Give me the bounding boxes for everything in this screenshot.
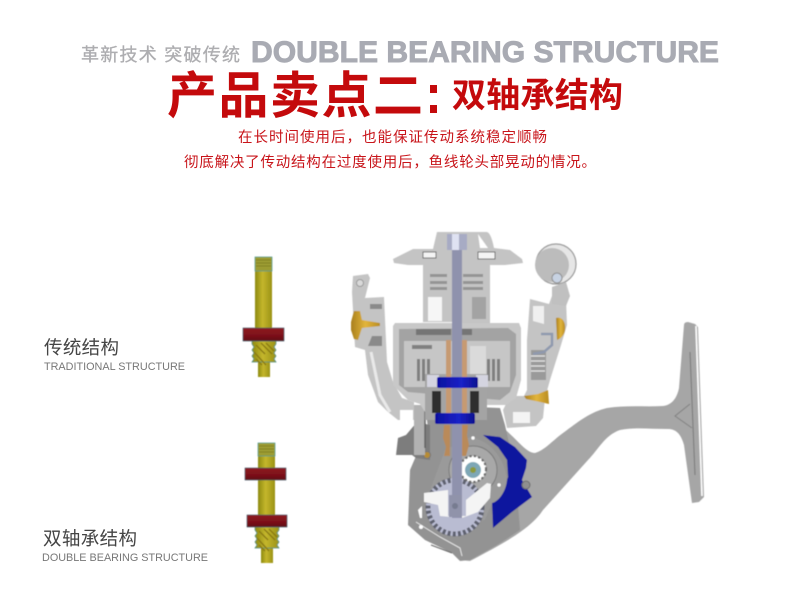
description text: 在长时间使用后，也能保证传动系统稳定顺畅 xyxy=(238,129,547,146)
label: traditional structure: TRADITIONAL STRUCTURE xyxy=(44,361,185,373)
label: double bearing structure: DOUBLE BEARING STRUCTURE xyxy=(42,552,208,564)
label: traditional structure: 传统结构 xyxy=(44,337,119,358)
lower gear housing xyxy=(408,405,520,561)
icon: traditional single-bearing shaft xyxy=(243,257,284,377)
label: double bearing structure xyxy=(42,528,208,564)
main shaft xyxy=(452,236,462,518)
title: selling point two: 双轴承结构 xyxy=(452,77,623,115)
rotor body xyxy=(393,323,521,420)
description text: 彻底解决了传动结构在过度使用后，鱼线轮头部晃动的情况。 xyxy=(184,153,596,171)
label: traditional structure xyxy=(44,337,185,373)
right brass screws xyxy=(556,318,565,340)
icon: double-bearing shaft xyxy=(245,443,287,563)
pinion gear xyxy=(460,456,486,482)
reel cross-section diagram xyxy=(351,232,704,561)
main gear sector plate xyxy=(430,437,507,530)
bearing housings xyxy=(425,374,487,420)
title: selling point two xyxy=(167,68,623,124)
spool cap and flange xyxy=(393,232,523,323)
right bail arm xyxy=(503,296,567,428)
heading: grey slogan line: DOUBLE BEARING STRUCTURE xyxy=(251,36,719,69)
title: selling point two: 产品卖点二 xyxy=(167,68,423,124)
description text xyxy=(184,129,596,171)
handle arm xyxy=(430,322,704,561)
drive gear xyxy=(426,478,484,536)
upper blue bearing xyxy=(437,377,478,388)
line-clip lever xyxy=(396,422,430,460)
copper sleeve xyxy=(446,340,451,416)
worm gear xyxy=(443,425,469,456)
roller xyxy=(535,244,576,306)
blue side plate xyxy=(483,435,532,528)
left bail arm xyxy=(352,274,414,420)
heading: grey slogan line: 革新技术 突破传统 xyxy=(81,45,240,65)
lower blue bearing xyxy=(435,413,475,424)
label: double bearing structure: 双轴承结构 xyxy=(43,528,137,549)
left brass screw xyxy=(351,311,380,340)
